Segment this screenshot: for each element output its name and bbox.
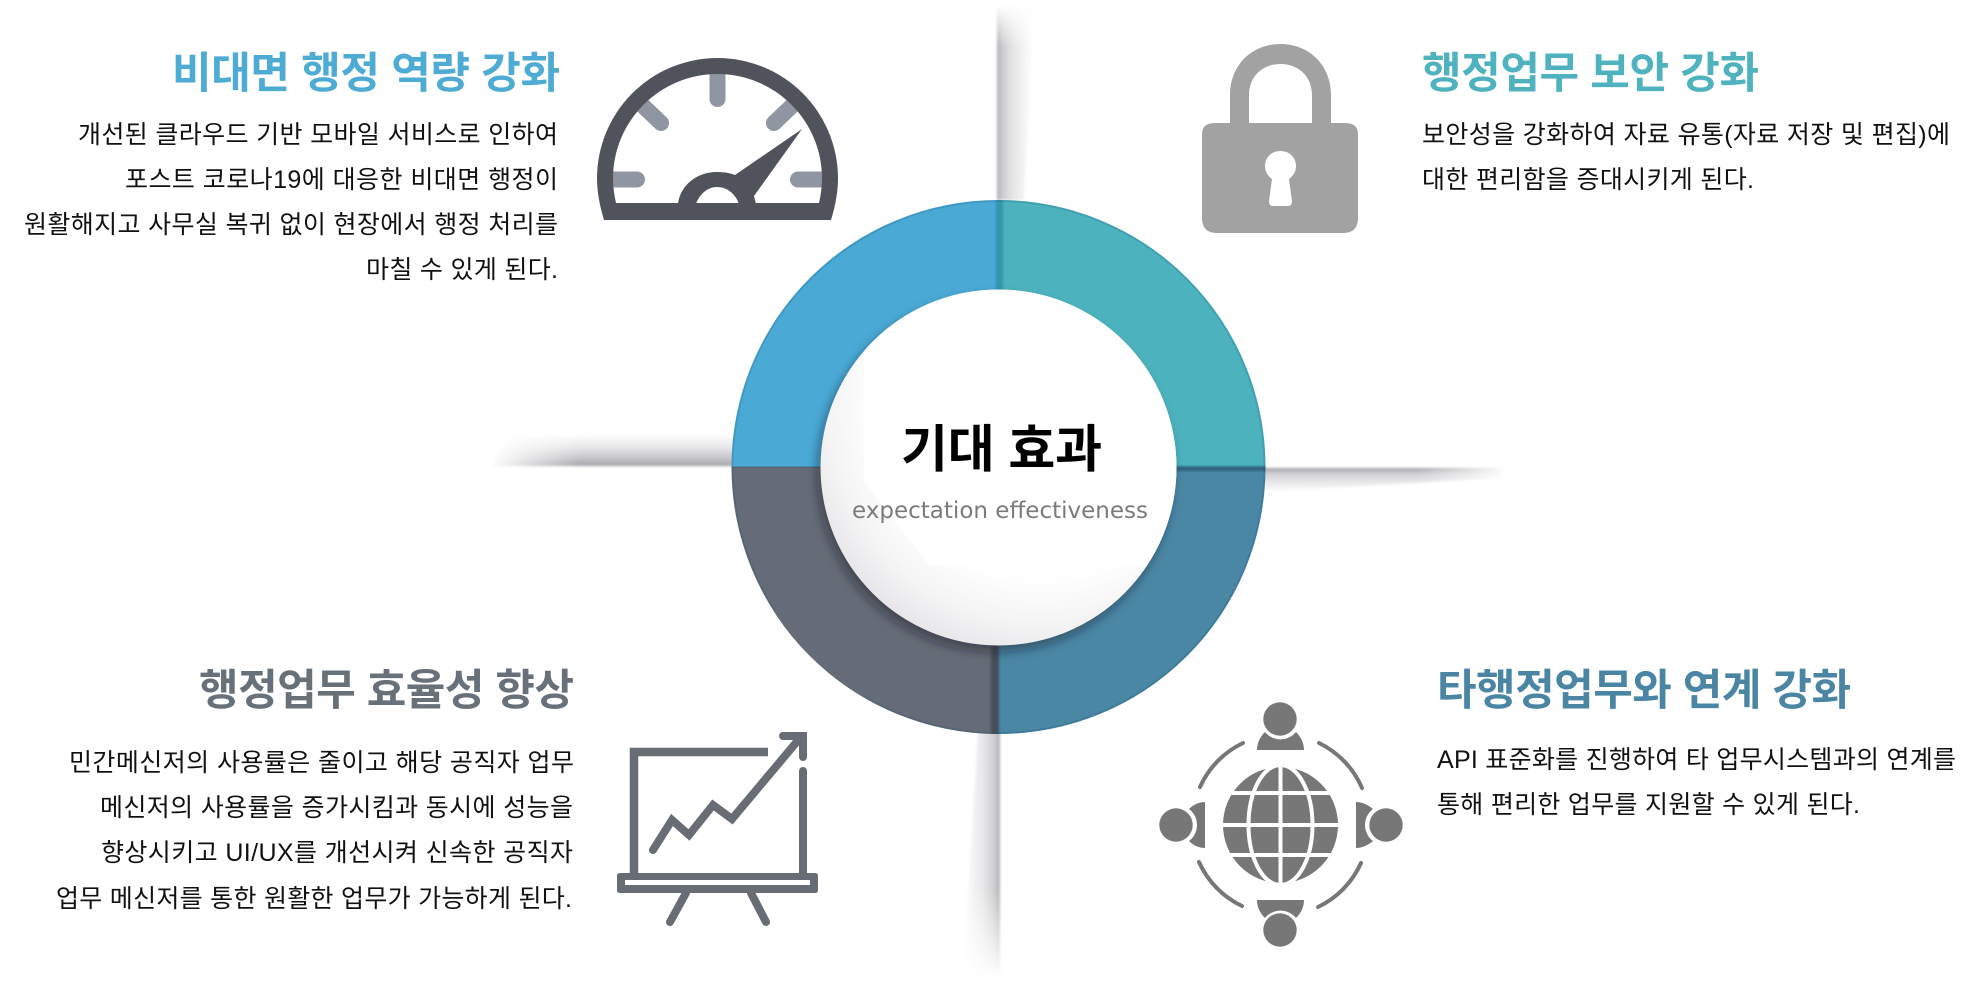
body text bbox=[1437, 746, 1956, 819]
ring quadrant: bottom right steel blue bbox=[998, 467, 1266, 734]
person: right bbox=[1356, 802, 1403, 848]
body text: 포스트 코로나19에 대응한 비대면 행정이 bbox=[125, 166, 558, 194]
heading: 행정업무 효율성 향상 bbox=[199, 667, 574, 715]
body text bbox=[1422, 121, 1950, 194]
body text: 통해 편리한 업무를 지원할 수 있게 된다. bbox=[1437, 791, 1860, 819]
person: left bbox=[1159, 802, 1205, 848]
ring quadrant: top left blue bbox=[732, 200, 998, 467]
body text: 개선된 클라우드 기반 모바일 서비스로 인하여 bbox=[78, 121, 558, 149]
center disc bbox=[820, 280, 1180, 646]
disc drop shadow bbox=[817, 296, 1173, 652]
person: top bbox=[1257, 702, 1304, 750]
donut ring with four quadrants bbox=[720, 195, 1270, 741]
heading: 행정업무 보안 강화 bbox=[1422, 50, 1759, 98]
body text: API 표준화를 진행하여 타 업무시스템과의 연계를 bbox=[1437, 746, 1956, 774]
gauge ticks bbox=[606, 76, 830, 180]
ring seams bbox=[720, 195, 1270, 741]
decorative shadow: right horizontal bbox=[1264, 466, 1498, 488]
body text: 메신저의 사용률을 증가시킴과 동시에 성능을 bbox=[100, 794, 573, 822]
ring quadrant: bottom left slate bbox=[732, 467, 998, 734]
decorative shadow: left horizontal bbox=[499, 438, 733, 468]
icon: globe with four people bbox=[1159, 702, 1403, 947]
body text: 마칠 수 있게 된다. bbox=[366, 256, 558, 284]
section: top left bbox=[24, 50, 560, 284]
section: top right bbox=[1422, 50, 1950, 194]
gauge needle bbox=[678, 129, 802, 204]
gauge body bbox=[597, 58, 838, 220]
center subtitle: expectation effectiveness bbox=[852, 498, 1148, 524]
decorative shadow: top vertical bbox=[996, 10, 1026, 200]
ring outline bbox=[732, 201, 1264, 733]
icon: presentation board with rising chart bbox=[617, 736, 818, 922]
body text: 업무 메신저를 통한 원활한 업무가 가능하게 된다. bbox=[56, 885, 572, 913]
decorative shadow: bottom vertical bbox=[970, 734, 1002, 966]
body text bbox=[24, 121, 558, 284]
icon: padlock bbox=[1202, 44, 1358, 233]
body text: 원활해지고 사무실 복귀 없이 현장에서 행정 처리를 bbox=[24, 211, 558, 239]
body text: 민간메신저의 사용률은 줄이고 해당 공직자 업무 bbox=[69, 749, 574, 777]
center title: 기대 효과 bbox=[901, 421, 1102, 478]
body text: 대한 편리함을 증대시키게 된다. bbox=[1422, 166, 1754, 194]
body text bbox=[56, 749, 574, 913]
heading: 비대면 행정 역량 강화 bbox=[172, 50, 560, 98]
body text: 향상시키고 UI/UX를 개선시켜 신속한 공직자 bbox=[101, 839, 573, 867]
body text: 보안성을 강화하여 자료 유통(자료 저장 및 편집)에 bbox=[1422, 121, 1950, 149]
heading: 타행정업무와 연계 강화 bbox=[1437, 667, 1851, 715]
ring quadrant: top right teal bbox=[998, 200, 1266, 467]
section: bottom right bbox=[1437, 667, 1956, 819]
icon: speedometer gauge bbox=[597, 58, 838, 220]
person: bottom bbox=[1257, 900, 1304, 947]
section: bottom left bbox=[56, 667, 574, 913]
globe bbox=[1218, 765, 1343, 885]
connecting arcs bbox=[1199, 743, 1362, 907]
